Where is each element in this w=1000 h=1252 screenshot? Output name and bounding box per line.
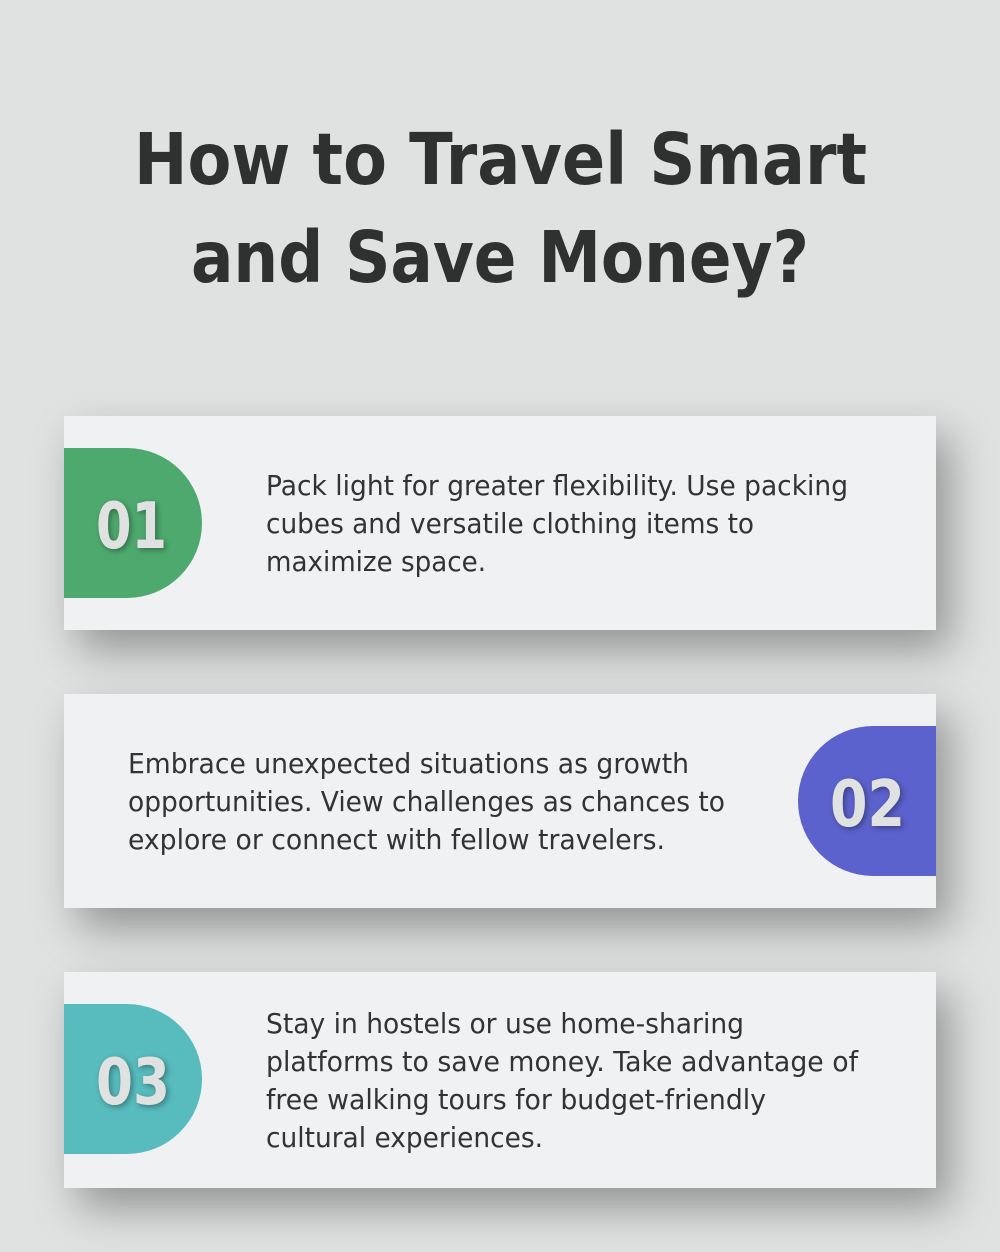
title — [134, 118, 867, 299]
text: step 3 description — [266, 1007, 859, 1154]
panel: step 1: cubes and versatile clothing items to — [266, 507, 754, 540]
icon: step 1 number badge — [64, 448, 202, 598]
icon: step 3 number badge — [64, 1004, 202, 1154]
panel: step 2: Embrace unexpected situations as growth — [128, 747, 689, 780]
icon: step 1 number badge: 01 — [96, 490, 167, 564]
title: How to Travel Smart — [134, 118, 867, 201]
panel: step 2 — [64, 694, 936, 908]
panel: step 3: cultural experiences. — [266, 1121, 543, 1154]
icon: step 2 number badge — [798, 726, 936, 876]
icon: step 2 number badge: 02 — [830, 768, 905, 842]
panel: step 2: opportunities. View challenges as chances to — [128, 785, 725, 818]
panel: step 3 — [64, 972, 936, 1188]
panel: step 1: maximize space. — [266, 545, 486, 578]
text: step 2 description — [128, 747, 725, 856]
panel: step 3: free walking tours for budget-friendly — [266, 1083, 766, 1116]
panel: step 3: platforms to save money. Take advantage of — [266, 1045, 859, 1078]
icon: step 3 number badge: 03 — [96, 1046, 170, 1120]
title: and Save Money? — [191, 216, 809, 299]
panel: step 1 — [64, 416, 936, 630]
text: step 1 description — [266, 469, 848, 578]
panel: step 3: Stay in hostels or use home-sharing — [266, 1007, 744, 1040]
panel: step 1: Pack light for greater flexibility. Use packing — [266, 469, 848, 502]
panel: step 2: explore or connect with fellow travelers. — [128, 823, 665, 856]
